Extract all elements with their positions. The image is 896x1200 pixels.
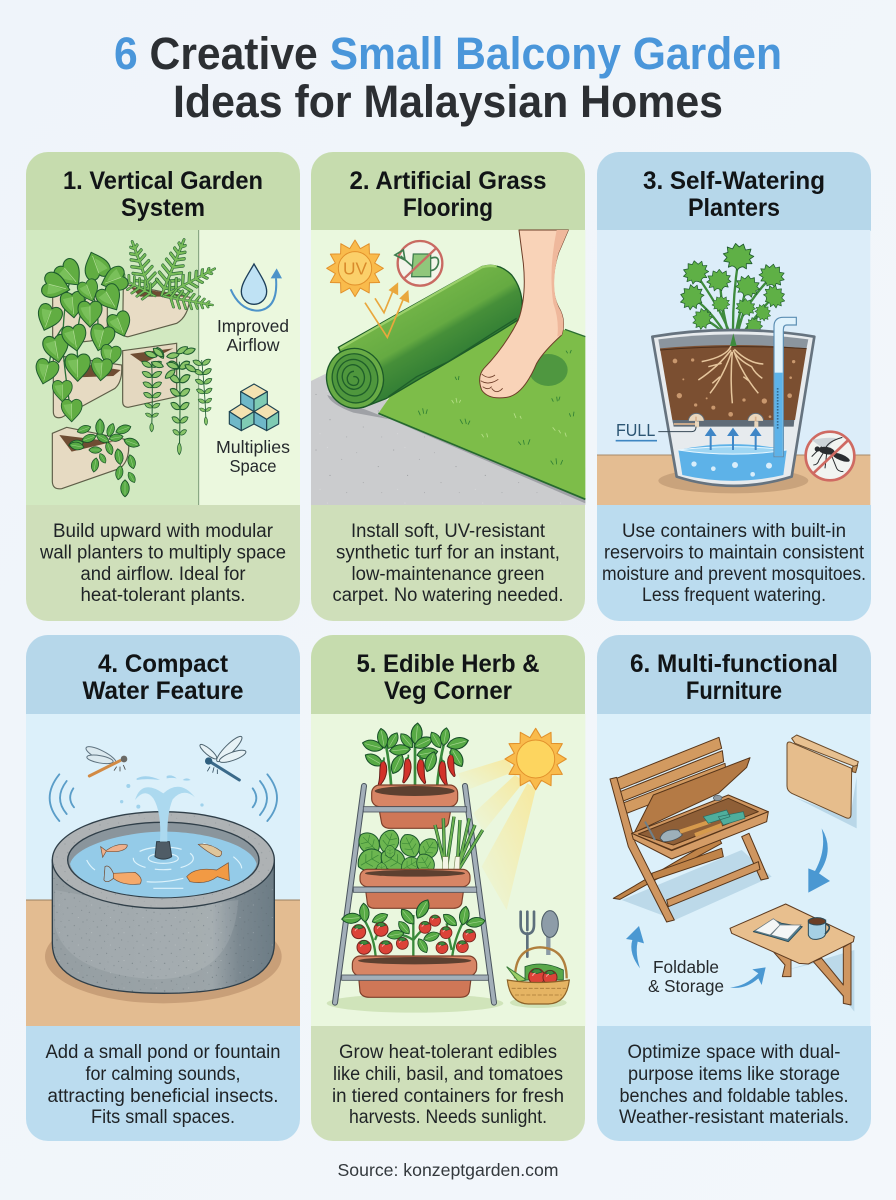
description block 4: for calming sounds, (86, 1064, 240, 1085)
tier 1: chili plants (361, 723, 470, 793)
tools in bench (645, 795, 745, 842)
description block 1: and airflow. Ideal for (80, 564, 246, 585)
pothos vine (32, 248, 135, 422)
icon: water drop with airflow arrow (231, 264, 282, 311)
illustration: rolled artificial turf (311, 230, 585, 505)
fish (101, 844, 229, 884)
description block 5: Grow heat-tolerant edibles (339, 1042, 557, 1063)
tier 3 pot (352, 956, 477, 997)
illustration: tiered edible garden (311, 714, 585, 1026)
heading band: Vertical Garden System: System (121, 194, 205, 222)
heading band: Vertical Garden System: 1. Vertical Garden (63, 167, 263, 195)
label: Multiplies Space: Space (230, 456, 276, 476)
ladder rails (335, 786, 494, 1003)
source footer: Source: konzeptgarden.com (338, 1160, 558, 1180)
icon: UV sun (327, 240, 383, 297)
illustration: wall planters with side benefits (26, 230, 300, 505)
panel: 6. Multi-functional Furniture (597, 635, 871, 1141)
description block 6: benches and foldable tables. (620, 1086, 848, 1107)
label: Improved Airflow (217, 316, 289, 355)
icon: orange dragonfly (84, 744, 127, 776)
pot cross-section (652, 330, 814, 486)
label: Multiplies Space (216, 437, 290, 476)
water level pipe (774, 317, 796, 457)
sun rays (458, 758, 536, 910)
crossbar 2 (353, 887, 477, 892)
ground shadow (327, 994, 503, 1013)
label: Foldable & Storage: & Storage (648, 976, 724, 996)
description block 6 (597, 1026, 871, 1141)
roots (698, 346, 763, 403)
panel: 5. Edible Herb & Veg Corner (311, 635, 585, 1141)
blue arrow: to bench (626, 926, 644, 968)
description block 1: Build upward with modular (53, 521, 274, 542)
heading band: Compact Water Feature (26, 635, 300, 714)
foot on turf (480, 230, 568, 398)
tier 2: basil and scallion (353, 817, 483, 878)
planter: bottom left (52, 419, 141, 497)
heading band: Artificial Grass Flooring: 2. Artificial Grass (350, 167, 546, 195)
description block 1 (26, 505, 300, 621)
label: Multiplies Space: Multiplies (216, 437, 290, 457)
heading band: Self-Watering Planters: 3. Self-Watering (643, 167, 825, 195)
crossbar 3 (342, 975, 488, 980)
heading band: Multi-functional Furniture: 6. Multi-functional (630, 650, 838, 678)
description block 6: Optimize space with dual- (628, 1042, 840, 1063)
tier 3: tomato plants (341, 897, 486, 962)
illustration: storage bench and foldable table (597, 714, 870, 1026)
description block 4: Add a small pond or fountain (46, 1042, 280, 1063)
description block 1: wall planters to multiply space (39, 542, 286, 564)
illustration: stone basin fountain (26, 714, 300, 1026)
heading band: Vertical Garden System (26, 152, 300, 231)
blue arrow: fold down (808, 828, 830, 893)
plant foliage (676, 242, 789, 346)
description block 4: Fits small spaces. (91, 1107, 235, 1128)
heading band: Multi-functional Furniture (597, 635, 871, 714)
rising water arrows (707, 429, 760, 450)
heading band: Edible Herb & Veg Corner: Veg Corner (384, 677, 512, 705)
wicking shelf (672, 413, 794, 427)
stone basin (52, 812, 274, 993)
turf lawn (378, 318, 585, 499)
heading band: Edible Herb & Veg Corner: 5. Edible Herb & (356, 650, 540, 678)
panel: 1. Vertical Garden System (26, 152, 300, 621)
description block 2: carpet. No watering needed. (332, 585, 564, 606)
icon: fork, spoon and vegetable basket (507, 911, 569, 1008)
heading band: Compact Water Feature: Water Feature (82, 677, 244, 705)
icon: no watering can (395, 241, 442, 286)
crossbar 1 (363, 807, 467, 812)
description block 3: moisture and prevent mosquitoes. (602, 564, 866, 585)
illustration: self-watering pot cross-section (597, 230, 870, 505)
turf roll (320, 265, 522, 415)
description block 2 (311, 505, 585, 621)
label: Foldable & Storage (648, 957, 724, 996)
panel: 4. Compact Water Feature (26, 635, 300, 1141)
heading band: Edible Herb & Veg Corner (311, 635, 585, 714)
description block 3: Less frequent watering. (642, 585, 826, 606)
heading band: Self-Watering Planters (597, 152, 871, 231)
icon: stacked cubes (229, 384, 279, 431)
unfolded table with book and mug (730, 904, 854, 1012)
blue arrow: to table (730, 967, 766, 988)
planter: middle left (53, 355, 122, 418)
title: 6 Creative Small Balcony Garden (114, 28, 782, 79)
planter: middle right with hanging plant (123, 343, 216, 455)
title: Ideas for Malaysian Homes (173, 76, 723, 127)
description block 5: in tiered containers for fresh (332, 1086, 564, 1107)
heading band: Artificial Grass Flooring: Flooring (403, 194, 493, 222)
description block 5: like chili, basil, and tomatoes (333, 1064, 563, 1085)
description block 6: Weather-resistant materials. (619, 1107, 849, 1128)
description block 2: Install soft, UV-resistant (351, 521, 546, 542)
panel: 2. Artificial Grass Flooring (311, 152, 585, 621)
description block 5 (311, 1026, 585, 1141)
panel: 3. Self-Watering Planters (597, 152, 871, 621)
UV reflection arrows (365, 284, 408, 337)
icon: UV sun: UV (343, 259, 367, 279)
heading band: Artificial Grass Flooring (311, 152, 585, 231)
heading band: Self-Watering Planters: Planters (688, 194, 780, 222)
description block 4: attracting beneficial insects. (48, 1086, 278, 1107)
description block 2: low-maintenance green (352, 564, 544, 585)
description block 4 (26, 1026, 300, 1141)
planter: top left (53, 293, 107, 342)
icon: no mosquitoes (806, 432, 854, 480)
FULL label line: FULL (616, 420, 656, 440)
label: Improved Airflow: Airflow (226, 335, 280, 355)
icon: sun (505, 728, 566, 790)
label: Foldable & Storage: Foldable (653, 957, 719, 977)
description block 6: purpose items like storage (628, 1064, 840, 1085)
sound waves (50, 774, 277, 821)
title (114, 28, 782, 127)
description block 3: reservoirs to maintain consistent (604, 542, 865, 564)
heading band: Compact Water Feature: 4. Compact (98, 650, 229, 678)
storage bench (610, 737, 772, 922)
concrete floor (311, 372, 585, 505)
tier 2 pot (360, 869, 470, 908)
stem base (730, 333, 737, 346)
label: Improved Airflow: Improved (217, 316, 289, 336)
planter: top right with fern (110, 236, 219, 337)
floor (597, 455, 870, 505)
description block 3: Use containers with built-in (622, 521, 846, 542)
fountain spout and jet (120, 775, 204, 859)
tier 1 pot (372, 785, 458, 828)
description block 1: heat-tolerant plants. (80, 585, 246, 606)
description block 2: synthetic turf for an instant, (336, 542, 560, 564)
icon: blue dragonfly (198, 734, 247, 780)
description block 3 (597, 505, 871, 621)
ripples (87, 843, 242, 888)
FULL label line (616, 420, 696, 441)
folded wall table (787, 735, 858, 828)
heading band: Multi-functional Furniture: Furniture (686, 677, 782, 705)
description block 5: harvests. Needs sunlight. (349, 1107, 547, 1128)
